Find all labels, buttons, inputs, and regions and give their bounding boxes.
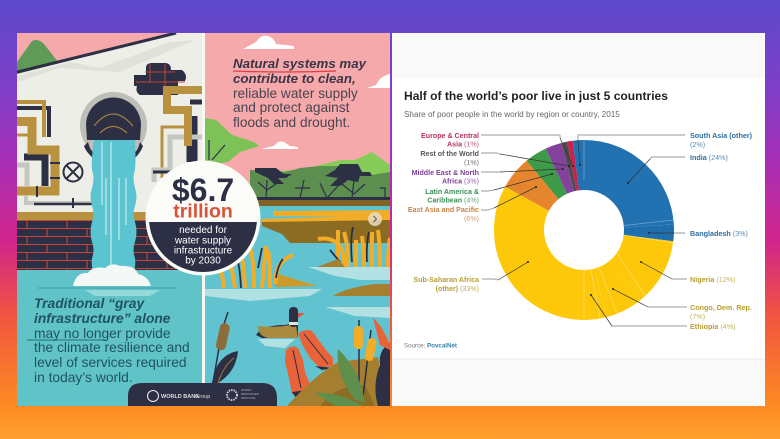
island under reeds bbox=[275, 273, 317, 287]
icon: valve wheel bbox=[64, 162, 82, 182]
logo bar: INSTITUTE bbox=[241, 396, 256, 400]
slice: Rest of the World bbox=[568, 141, 572, 192]
small island bbox=[333, 284, 390, 296]
label: Latin America & Caribbean: Caribbean (4%) bbox=[427, 196, 479, 204]
label: India: India (24%) bbox=[690, 153, 728, 162]
funding badge bbox=[146, 160, 260, 278]
panel: water infrastructure illustration bbox=[17, 33, 390, 406]
text: traditional gray infrastructure: may no longer provide bbox=[34, 326, 171, 341]
donut chart bbox=[519, 165, 649, 295]
slice: East Asia and Pacific bbox=[527, 180, 543, 199]
funding badge: trillion bbox=[173, 200, 233, 222]
logo bar: RESOURCES bbox=[241, 392, 259, 396]
wall base and bricks bbox=[17, 212, 178, 270]
label: Ethiopia: Ethiopia (4%) bbox=[690, 322, 736, 331]
divider bbox=[202, 33, 205, 406]
logo bar bbox=[128, 383, 277, 406]
funding badge: $6.7 bbox=[172, 172, 234, 208]
label: Middle East & North Africa: Middle East & North bbox=[412, 169, 479, 177]
label: Congo, Dem. Rep.: (7%) bbox=[690, 312, 705, 321]
label: Sub-Saharan Africa other: (other) (33%) bbox=[436, 285, 479, 293]
right pipes bbox=[153, 90, 203, 182]
source note: Source: PovcalNet bbox=[404, 342, 457, 350]
panel: poverty chart card bbox=[392, 33, 765, 406]
label: Middle East & North Africa: Africa (3%) bbox=[442, 178, 479, 186]
icon: duck bbox=[256, 307, 305, 338]
dark foliage right bbox=[375, 343, 390, 406]
reeds left bbox=[218, 246, 293, 288]
slice: South Asia other bbox=[576, 140, 584, 191]
trees bbox=[250, 164, 390, 200]
text: traditional gray infrastructure bbox=[27, 296, 190, 385]
foam bbox=[205, 267, 390, 348]
cattail left bbox=[212, 312, 238, 383]
green foliage left bbox=[205, 118, 259, 165]
funding badge: water supply bbox=[174, 236, 231, 246]
water splash bbox=[38, 264, 176, 296]
text: natural systems: contribute to clean, bbox=[233, 71, 356, 86]
slice: Nigeria bbox=[625, 238, 648, 280]
label: Bangladesh: Bangladesh (3%) bbox=[690, 229, 748, 238]
slice: Middle East and North Africa bbox=[556, 167, 568, 171]
brown mound bbox=[287, 357, 385, 406]
reed island right bbox=[317, 259, 345, 267]
outlet pipe bbox=[80, 92, 147, 159]
text: natural systems: and protect against bbox=[233, 100, 350, 115]
label: East Asia and Pacific: East Asia and Pacific bbox=[408, 206, 479, 214]
label: South Asia other: South Asia (other) bbox=[690, 131, 753, 140]
chart subtitle: Share of poor people in the world by region or country, 2015 bbox=[404, 110, 620, 119]
text: natural systems: reliable water supply bbox=[233, 86, 358, 101]
slice: Sub-Saharan Africa other bbox=[519, 199, 584, 295]
slice: Congo bbox=[600, 280, 625, 293]
clouds bbox=[243, 36, 390, 149]
leader lines bbox=[481, 135, 687, 326]
label: Europe & Central Asia: Asia (1%) bbox=[447, 140, 479, 148]
slice: Europe and Central Asia bbox=[572, 141, 576, 191]
slice: India bbox=[584, 165, 649, 226]
chart title: Half of the world’s poor live in just 5 countries bbox=[404, 89, 668, 103]
slice: Bangladesh bbox=[623, 226, 674, 238]
logo bar: WORLD bbox=[241, 388, 251, 392]
nature water bbox=[205, 205, 390, 406]
text: traditional gray infrastructure: Traditional “gray bbox=[34, 296, 145, 311]
left pipes bbox=[17, 102, 94, 208]
river banks bbox=[255, 200, 390, 243]
label: Europe & Central Asia: Europe & Central bbox=[421, 132, 479, 140]
slice: Latin America and Caribbean bbox=[543, 171, 556, 180]
label: Congo, Dem. Rep.: Congo, Dem. Rep. bbox=[690, 303, 752, 312]
text: natural systems: floods and drought. bbox=[233, 115, 350, 130]
left scene: gray infrastructure wall bbox=[17, 33, 204, 406]
orange leaves bbox=[285, 330, 334, 398]
label: Rest of the World: (1%) bbox=[464, 159, 479, 167]
text: natural systems: Natural systems may bbox=[233, 56, 367, 71]
waterfall bbox=[90, 140, 136, 272]
green leaves bbox=[315, 349, 365, 406]
text: natural systems bbox=[233, 56, 367, 130]
bottom water bbox=[17, 270, 204, 406]
logo bar: WORLD BANK bbox=[161, 394, 199, 400]
funding badge: infrastructure bbox=[174, 246, 233, 256]
icon: next arrow bbox=[368, 212, 382, 226]
label: Nigeria: Nigeria (12%) bbox=[690, 275, 736, 284]
label: South Asia other: (2%) bbox=[690, 140, 705, 149]
label: Sub-Saharan Africa other: Sub-Saharan Africa bbox=[413, 276, 479, 284]
label: Latin America & Caribbean: Latin America & bbox=[425, 188, 479, 196]
slice: Ethiopia bbox=[584, 293, 600, 295]
cattails right bbox=[354, 318, 390, 397]
label: East Asia and Pacific: (6%) bbox=[464, 215, 479, 223]
text: traditional gray infrastructure: in today’s world. bbox=[34, 370, 133, 385]
right scene: natural systems bbox=[205, 36, 390, 406]
funding badge: needed for bbox=[179, 225, 228, 236]
text: traditional gray infrastructure: the climate resilience and bbox=[34, 340, 190, 355]
hills bbox=[280, 152, 390, 175]
text: traditional gray infrastructure: infrastructure” alone bbox=[34, 311, 171, 326]
funding badge: by 2030 bbox=[185, 256, 221, 266]
reeds right bbox=[318, 227, 390, 267]
logo bar: Group bbox=[195, 394, 210, 400]
label: Rest of the World: Rest of the World bbox=[420, 150, 479, 158]
brick patch on wall bbox=[134, 63, 186, 95]
text: traditional gray infrastructure: level of services required bbox=[34, 355, 187, 370]
